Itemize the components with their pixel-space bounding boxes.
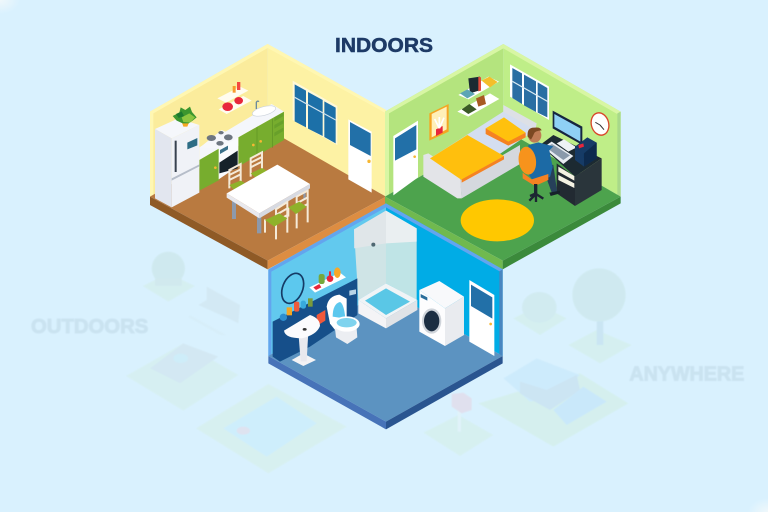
icon: near chairs xyxy=(265,191,308,239)
icon: window xyxy=(293,81,337,145)
icon: window xyxy=(510,64,549,120)
icon: swimming pool xyxy=(196,384,347,473)
icon: bush xyxy=(513,292,567,335)
icon: monitor and computer xyxy=(543,111,597,167)
icon: bed xyxy=(423,105,537,198)
icon: door xyxy=(393,121,418,195)
icon: shelf with bottles xyxy=(309,267,346,293)
icon: pedestal sink xyxy=(284,315,320,366)
panel: anywhere faded scene xyxy=(423,268,744,456)
icon: cabinets and counter xyxy=(199,101,284,191)
kitchen walls xyxy=(150,44,386,198)
icon: round rug xyxy=(461,199,534,241)
panel: bathroom room xyxy=(268,203,503,429)
label: anywhere: ANYWHERE xyxy=(629,364,744,386)
bedroom walls xyxy=(385,44,621,197)
icon: door xyxy=(348,119,372,193)
panel: kitchen room xyxy=(150,44,386,269)
icon: door xyxy=(469,280,494,356)
icon: vanity counter xyxy=(273,278,357,362)
icon: stove and oven xyxy=(200,130,238,179)
icon: potted plant xyxy=(173,107,197,127)
icon: patio xyxy=(126,343,238,411)
kitchen floor xyxy=(150,129,386,269)
icon: washing machine xyxy=(419,281,464,346)
icon: poster xyxy=(429,104,449,141)
icon: desk xyxy=(540,135,602,206)
bathroom floor xyxy=(268,289,503,429)
icon: person on chair xyxy=(517,127,560,202)
icon: wall shelf with dishes xyxy=(217,82,252,114)
icon: bench xyxy=(188,287,240,335)
icon: house and car xyxy=(478,358,628,447)
label: outdoors: OUTDOORS xyxy=(31,315,148,338)
icon: dining table xyxy=(227,165,310,233)
icon: tall tree xyxy=(568,268,632,363)
bedroom floor xyxy=(385,129,621,269)
icon: tree on grass xyxy=(143,252,195,302)
icon: mailbox xyxy=(423,393,493,456)
icon: toilet xyxy=(327,295,360,344)
panel: outdoors faded scene xyxy=(31,252,347,473)
panel: bedroom room xyxy=(385,44,621,269)
title: INDOORS xyxy=(335,35,433,57)
bathroom walls xyxy=(268,203,503,357)
icon: toiletries xyxy=(280,298,313,321)
icon: fridge xyxy=(155,118,199,207)
icon: shower cabin xyxy=(354,211,417,328)
icon: wall shelves with books xyxy=(457,77,499,117)
icon: far chairs xyxy=(229,152,268,191)
icon: round mirror xyxy=(278,270,308,307)
icon: wall clock xyxy=(589,111,611,137)
